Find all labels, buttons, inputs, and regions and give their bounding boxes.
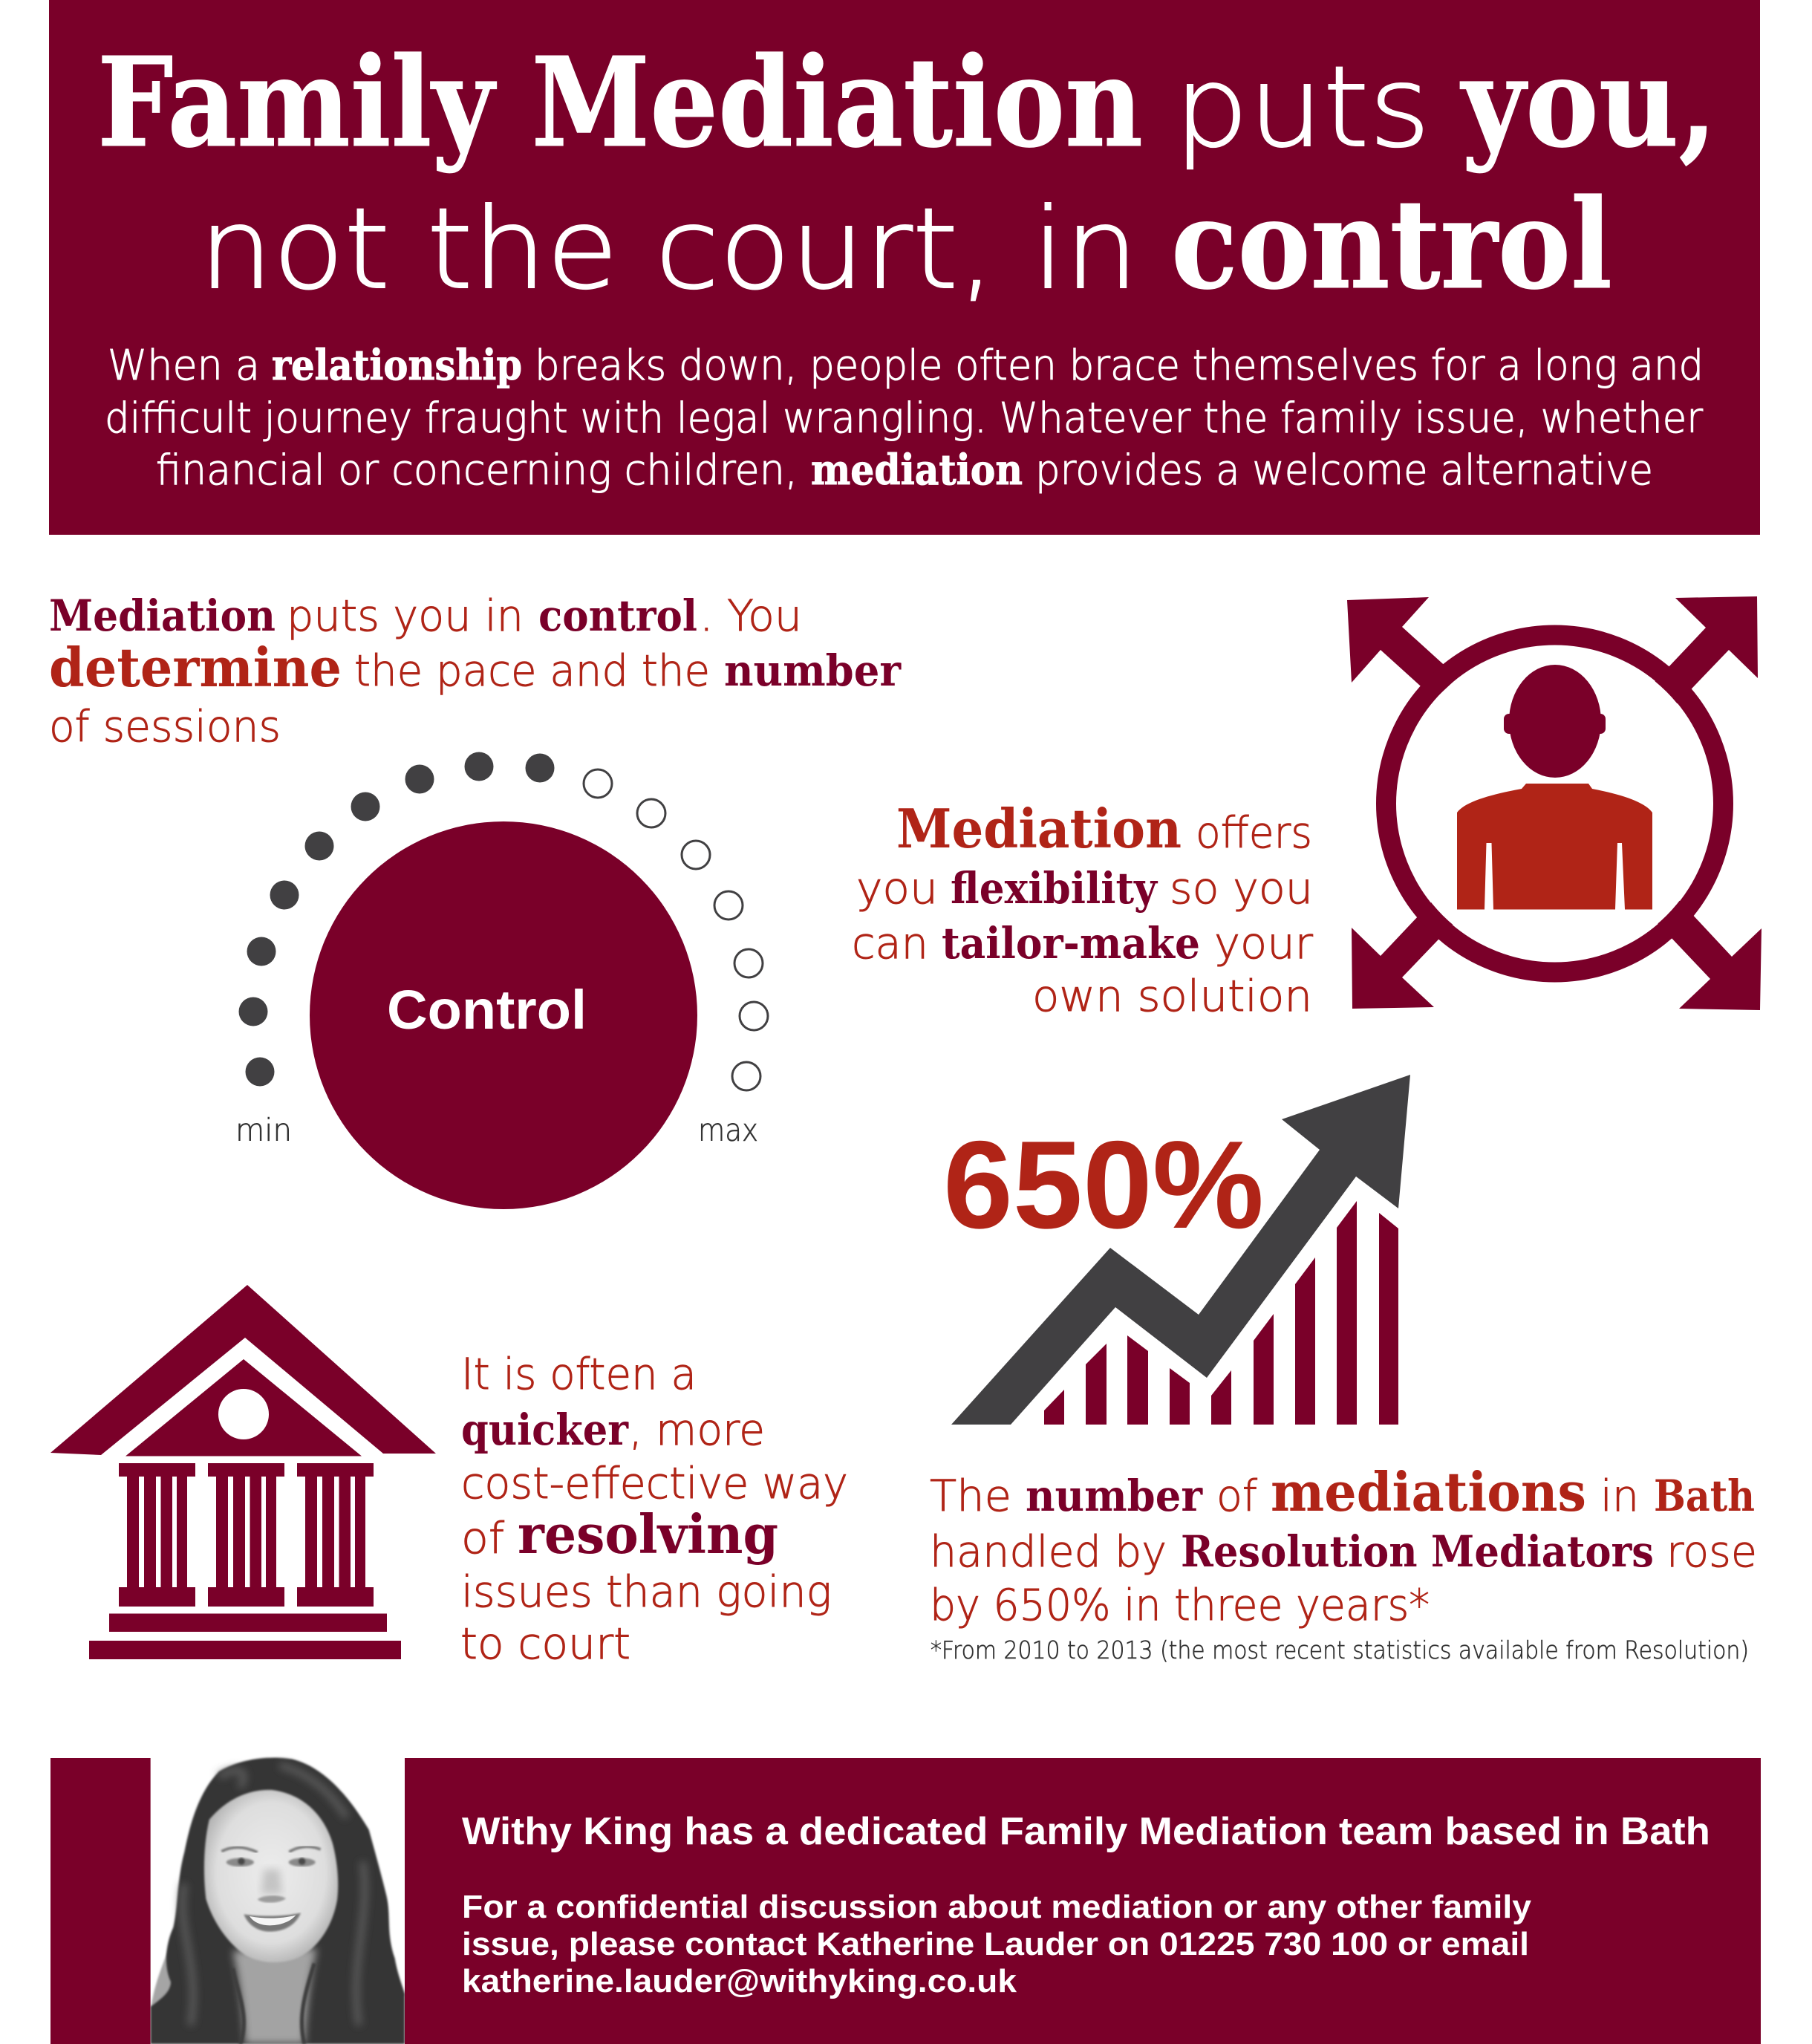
text: flexibility: your: [1214, 918, 1313, 969]
hair: [151, 1757, 405, 2044]
title: Family Mediation: [97, 30, 1143, 175]
eyes: [226, 1858, 316, 1866]
text: quicker and cost-effective: quicker: [461, 1405, 629, 1455]
text: flexibility: tailor-make: [942, 918, 1200, 969]
text: flexibility: offers: [1196, 807, 1312, 858]
contact details: katherine.lauder@withyking.co.uk: [462, 1963, 1017, 1999]
control dial: [235, 752, 768, 1209]
bars: [1044, 1201, 1398, 1425]
text: you determine the pace: control: [538, 590, 697, 641]
text: quicker and cost-effective: , more: [629, 1405, 765, 1455]
text: quicker and cost-effective: issues than going: [461, 1566, 832, 1617]
title: [97, 30, 1717, 317]
stray hair wisps: [151, 1950, 405, 2008]
text: number of mediations: handled by: [930, 1526, 1167, 1577]
outward arrows: [1347, 596, 1762, 1010]
text: you determine the pace: the pace and the: [354, 645, 710, 696]
max label: max: [698, 1112, 758, 1148]
title: control: [1171, 172, 1612, 317]
roof: [50, 1285, 436, 1455]
portrait: [151, 1757, 405, 2044]
intro text: [105, 341, 1704, 495]
column 2: [208, 1463, 284, 1607]
empty level dots: [584, 769, 768, 1090]
text: you determine the pace: number: [724, 645, 902, 696]
text: you determine the pace: [49, 590, 902, 752]
text: flexibility: [852, 797, 1313, 1021]
dial knob: [310, 821, 697, 1209]
teeth: [250, 1916, 296, 1925]
text: number of mediations: rose: [1666, 1526, 1757, 1577]
column 3: [297, 1463, 374, 1607]
text: you determine the pace: puts you in: [287, 590, 524, 641]
text: number of mediations: in: [1600, 1471, 1639, 1521]
pediment: [126, 1359, 362, 1456]
column 1: [119, 1463, 195, 1607]
hair strands over neck: [232, 1963, 314, 2044]
rising arrow: [951, 1075, 1410, 1425]
text: quicker and cost-effective: resolving: [518, 1503, 778, 1566]
mouth: [244, 1913, 301, 1932]
text: number of mediations: number: [1026, 1471, 1203, 1521]
text: you determine the pace: of sessions: [49, 701, 281, 752]
panel: contact footer: [50, 1757, 1761, 2044]
body: [1457, 784, 1652, 909]
text: you determine the pace: determine: [49, 636, 342, 699]
text: you determine the pace: . You: [700, 590, 802, 641]
text: flexibility: can: [852, 918, 928, 969]
eyebrows: [221, 1846, 321, 1852]
text: flexibility: Mediation: [896, 797, 1182, 860]
text: number of mediations: The: [930, 1471, 1011, 1521]
panel: header: [49, 0, 1760, 535]
text: flexibility: so you: [1170, 863, 1313, 914]
intro text: When a: [108, 342, 260, 390]
text: number of mediations: of: [1216, 1471, 1258, 1521]
title: you,: [1459, 30, 1717, 175]
text: number of mediations: [930, 1460, 1757, 1664]
neck: [232, 1948, 317, 2044]
text: flexibility: you: [856, 863, 938, 914]
steps: [89, 1613, 401, 1659]
text: quicker and cost-effective: cost-effective way: [461, 1458, 848, 1508]
title: puts: [1174, 43, 1430, 172]
text: flexibility: own solution: [1032, 971, 1312, 1021]
intro text: relationship: [272, 341, 522, 390]
contact heading: Withy King has a dedicated Family Mediation team based in Bath: [462, 1810, 1710, 1853]
text: quicker and cost-effective: to court: [460, 1618, 630, 1669]
min label: min: [235, 1112, 292, 1148]
icon: courthouse: [50, 1285, 436, 1659]
nose shadow: [261, 1869, 282, 1894]
intro text: mediation: [811, 446, 1023, 495]
intro text: difficult journey fraught with legal wrangling. Whatever the family issue, whether: [105, 394, 1703, 443]
ring: [1396, 645, 1712, 962]
text: number of mediations: Resolution Mediators: [1181, 1526, 1654, 1577]
650% figure: 650%: [943, 1115, 1264, 1254]
intro text: provides a welcome alternative: [1035, 446, 1653, 495]
face: [204, 1790, 338, 1962]
text: quicker and cost-effective: It is often a: [461, 1349, 697, 1399]
title: not the court, in: [199, 185, 1138, 314]
text: number of mediations: mediations: [1271, 1460, 1586, 1523]
text: number of mediations: by 650% in three years*: [930, 1580, 1430, 1630]
intro text: financial or concerning children,: [156, 446, 798, 495]
dial label: Control: [387, 979, 587, 1041]
footnote: *From 2010 to 2013 (the most recent statistics available from Resolution): [931, 1635, 1749, 1664]
chart: rising arrow and bars: [943, 1075, 1410, 1425]
text: quicker and cost-effective: of: [461, 1513, 505, 1563]
filled level dots: [239, 752, 554, 1086]
intro text: breaks down, people often brace themselves for a long and: [535, 342, 1704, 390]
contact details: For a confidential discussion about mediation or any other family: [462, 1889, 1532, 1925]
text: number of mediations: Bath: [1654, 1471, 1755, 1521]
contact details: [462, 1889, 1532, 1999]
text: you determine the pace: Mediation: [49, 590, 276, 641]
text: flexibility: flexibility: [951, 863, 1158, 914]
text: quicker and cost-effective: [460, 1349, 848, 1669]
icon: person with outward arrows: [1347, 596, 1762, 1010]
hair highlights: [183, 1765, 365, 2025]
contact details: issue, please contact Katherine Lauder on 01225 730 100 or email: [462, 1926, 1529, 1962]
head: [1504, 665, 1606, 778]
